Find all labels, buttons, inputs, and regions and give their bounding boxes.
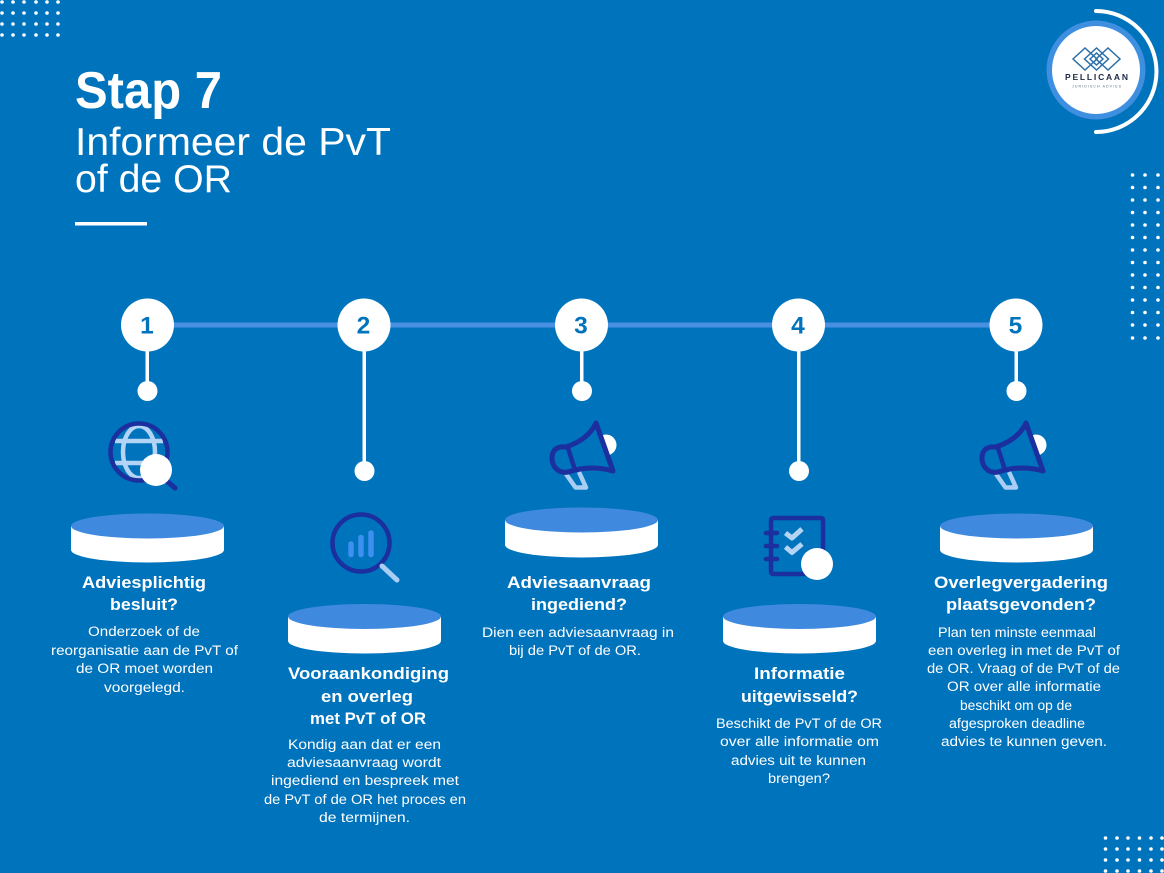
step 5 heading — [934, 573, 1108, 614]
step 1 text: reorganisatie aan de PvT of — [51, 643, 238, 658]
platform 1 — [71, 514, 224, 562]
step 3 marker: 3 — [574, 312, 588, 340]
step 4 heading: Informatie — [754, 664, 845, 683]
step 5 text: OR over alle informatie — [947, 679, 1101, 694]
platform 3 — [505, 508, 658, 557]
step 4 text: advies uit te kunnen — [731, 753, 866, 768]
step 5 text: advies te kunnen geven. — [941, 734, 1107, 749]
step 2 heading: Vooraankondiging — [288, 664, 449, 683]
step 5 text: een overleg in met de PvT of — [928, 643, 1120, 658]
step 5 text — [927, 625, 1120, 749]
title underline — [75, 222, 147, 226]
step 4 marker — [772, 298, 825, 481]
step 4 heading — [741, 664, 858, 706]
title — [75, 62, 391, 201]
step 2 text: adviesaanvraag wordt — [287, 755, 441, 770]
step 3 marker — [555, 298, 608, 401]
platform 5 — [940, 514, 1093, 562]
step 1 heading: Adviesplichtig — [82, 573, 206, 592]
step 5 heading: plaatsgevonden? — [946, 595, 1096, 614]
step 4 heading: uitgewisseld? — [741, 687, 858, 706]
step 1 text: voorgelegd. — [104, 680, 185, 695]
icon: checklist notebook — [766, 518, 833, 580]
icon: megaphone step 5 — [982, 423, 1046, 488]
step 1 text: de OR moet worden — [76, 661, 213, 676]
step 2 text: de termijnen. — [319, 810, 410, 825]
step 1 text — [51, 624, 238, 695]
step 2 marker — [338, 298, 390, 481]
timeline connector — [147, 322, 1016, 328]
step 2 heading: en overleg — [321, 687, 413, 706]
step 4 text: over alle informatie om — [720, 734, 879, 749]
step 1 text: Onderzoek of de — [88, 624, 200, 639]
icon: chart search — [332, 514, 397, 580]
step 2 text: ingediend en bespreek met — [271, 773, 459, 788]
step 2 heading: met PvT of OR — [310, 709, 426, 728]
step 1 heading: besluit? — [110, 595, 178, 614]
platform 4 — [723, 604, 876, 654]
title: Stap 7 — [75, 62, 222, 120]
step 1 marker: 1 — [140, 312, 154, 340]
logo — [1046, 11, 1156, 132]
step 2 heading — [288, 664, 449, 728]
step 2 text: de PvT of de OR het proces en — [264, 792, 466, 807]
step 5 text: afgesproken deadline — [949, 716, 1085, 731]
step 2 text: Kondig aan dat er een — [288, 737, 441, 752]
step 5 text: de OR. Vraag of de PvT of de — [927, 661, 1120, 676]
step 5 marker — [990, 298, 1042, 401]
step 4 text: Beschikt de PvT of de OR — [716, 716, 882, 731]
logo: PELLICAAN — [1065, 72, 1128, 82]
step 3 heading: ingediend? — [531, 595, 627, 614]
step 3 text: bij de PvT of de OR. — [509, 643, 641, 658]
step 1 marker — [121, 298, 174, 401]
step 4 text: brengen? — [768, 771, 830, 786]
step 4 marker: 4 — [791, 312, 805, 340]
step 2 text — [264, 737, 466, 825]
step 3 text — [482, 625, 674, 658]
step 3 heading — [507, 573, 651, 614]
platform 2 — [288, 604, 441, 654]
step 1 heading — [82, 573, 206, 614]
step 3 text: Dien een adviesaanvraag in — [482, 625, 674, 640]
step 5 text: beschikt om op de — [960, 698, 1072, 713]
step 5 heading: Overlegvergadering — [934, 573, 1108, 592]
step 5 marker: 5 — [1009, 312, 1022, 340]
step 2 marker: 2 — [357, 312, 370, 340]
step 4 text — [716, 716, 882, 786]
step 5 text: Plan ten minste eenmaal — [938, 625, 1096, 640]
icon: globe search — [110, 424, 175, 488]
icon: megaphone step 3 — [552, 423, 616, 488]
logo: JURIDISCH ADVIES — [1072, 84, 1122, 88]
title: of de OR — [75, 158, 232, 201]
title: Informeer de PvT — [75, 121, 391, 164]
step 3 heading: Adviesaanvraag — [507, 573, 651, 592]
